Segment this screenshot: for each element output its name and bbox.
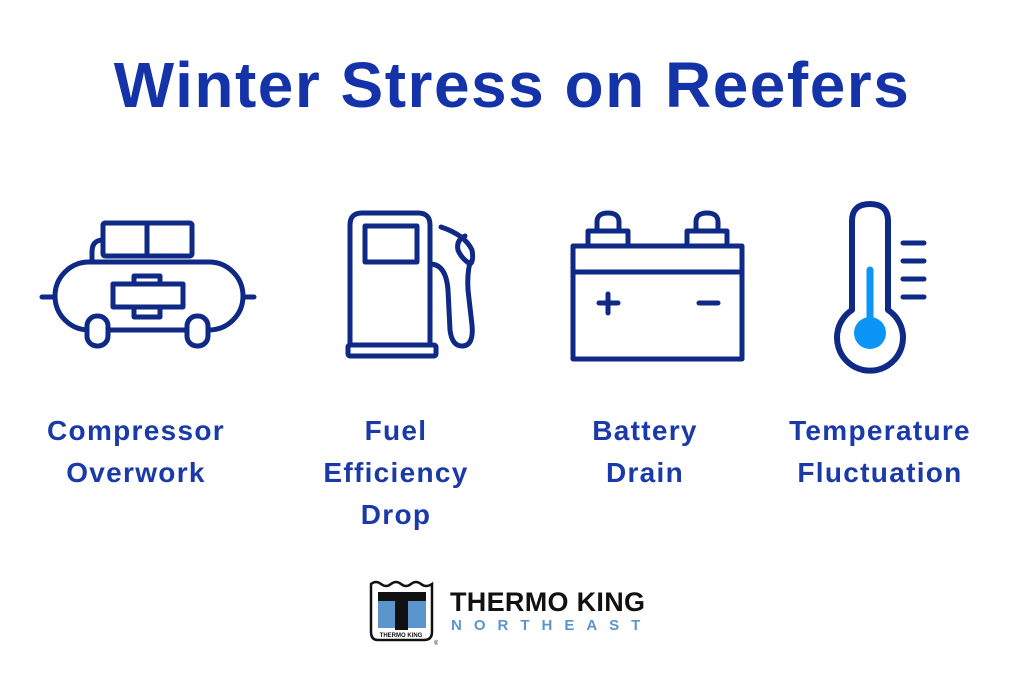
label: compressor: Overwork	[66, 457, 206, 488]
logo	[370, 580, 652, 646]
label: fuel: Fuel	[365, 415, 427, 446]
title: Winter Stress on Reefers	[114, 49, 910, 121]
label: fuel: Drop	[361, 499, 431, 530]
label: temperature	[789, 415, 971, 488]
label: compressor: Compressor	[47, 415, 225, 446]
label: temperature: Temperature	[789, 415, 971, 446]
label: battery: Battery	[592, 415, 698, 446]
label: fuel: Efficiency	[323, 457, 469, 488]
logo: NORTHEAST	[451, 617, 652, 634]
label: temperature: Fluctuation	[797, 457, 963, 488]
icon: thermometer	[837, 204, 924, 371]
icon: compressor	[42, 223, 254, 346]
icon: fuel pump	[348, 213, 473, 356]
label: battery: Drain	[606, 457, 684, 488]
label: battery	[592, 415, 698, 488]
logo mark: THERMO KING	[380, 633, 423, 639]
icon: battery	[573, 213, 742, 359]
label: fuel	[323, 415, 469, 530]
label: compressor	[47, 415, 225, 488]
logo mark	[370, 580, 438, 646]
logo text: THERMO KING	[450, 587, 645, 617]
